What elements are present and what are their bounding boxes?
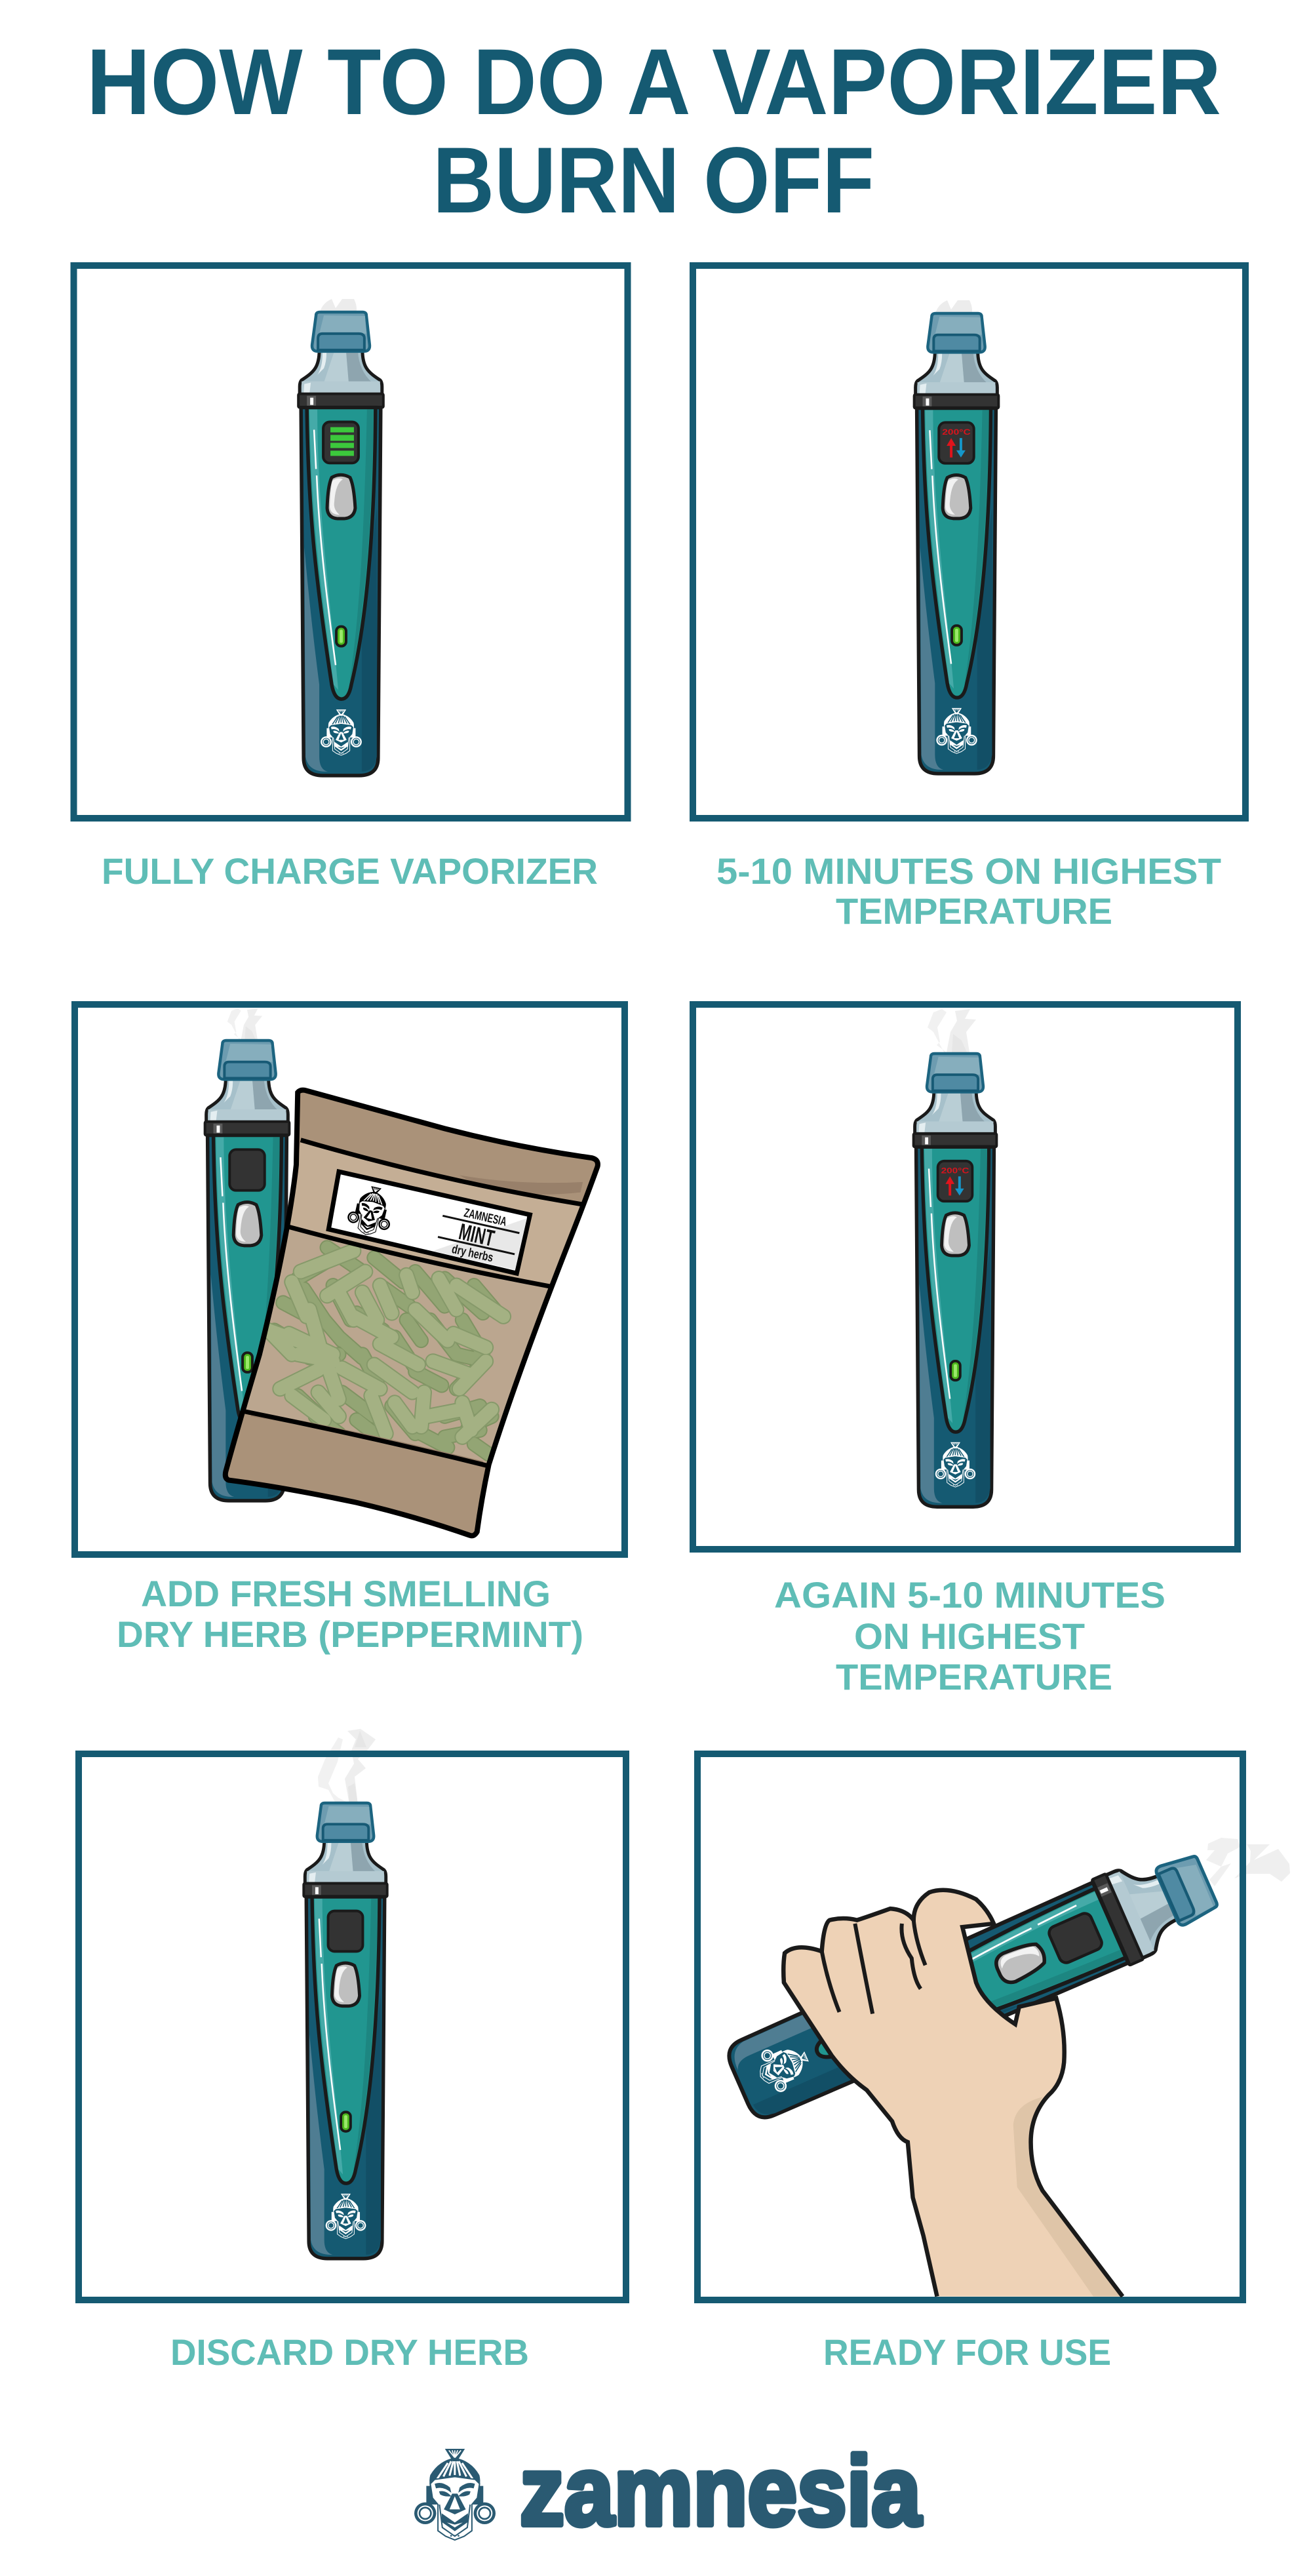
caption: [774, 1574, 1165, 1697]
caption: ON HIGHEST: [854, 1615, 1085, 1657]
panel: step 1 fully charge: [73, 266, 628, 892]
icon: vape smoke: [318, 1729, 376, 1804]
caption: FULLY CHARGE VAPORIZER: [102, 850, 598, 892]
caption: ADD FRESH SMELLING: [141, 1573, 551, 1614]
panel: step 3 add dry herb: [75, 1004, 625, 1655]
panel: step 2 highest temperature: [693, 266, 1245, 932]
panel: step 6 ready for use: [697, 1754, 1290, 2373]
bag label text: MINT: [456, 1219, 497, 1252]
title: BURN OFF: [433, 129, 874, 233]
bag label text: [435, 1202, 522, 1269]
bag label text: dry herbs: [450, 1242, 494, 1265]
title: [87, 30, 1221, 233]
logo: [414, 2436, 922, 2546]
caption: DISCARD DRY HERB: [170, 2331, 529, 2373]
icon: vaporizer showing temperature: [914, 1054, 996, 1507]
icon: vaporizer behind bag: [205, 1040, 289, 1501]
icon: vaporizer with full battery: [298, 312, 383, 776]
icon: logo mask: [414, 2449, 496, 2540]
logo wordmark: zamnesia: [520, 2436, 922, 2546]
icon: vape smoke: [1206, 1838, 1290, 1886]
frame: [75, 1004, 625, 1555]
icon: mask on bag label: [345, 1183, 397, 1239]
panel: step 5 discard herb: [79, 1729, 626, 2373]
icon: vape smoke: [227, 1008, 262, 1040]
caption: [117, 1573, 583, 1655]
icon: hand: [783, 1890, 1123, 2297]
frame: [693, 266, 1245, 818]
caption: TEMPERATURE: [836, 890, 1112, 932]
panel: step 4 again highest temperature: [693, 1004, 1238, 1697]
caption: 5-10 MINUTES ON HIGHEST: [716, 850, 1221, 892]
icon: vaporizer: [303, 1803, 387, 2259]
icon: vape smoke: [320, 299, 357, 314]
frame: [693, 1004, 1238, 1549]
icon: vaporizer in hand: [721, 1838, 1226, 2128]
frame: [697, 1754, 1243, 2300]
icon: vaporizer showing temperature: [914, 313, 998, 774]
icon: vape smoke: [935, 300, 972, 315]
caption: [716, 850, 1221, 932]
caption: AGAIN 5-10 MINUTES: [774, 1574, 1165, 1615]
caption: DRY HERB (PEPPERMINT): [117, 1614, 583, 1655]
caption: READY FOR USE: [823, 2331, 1111, 2373]
title: HOW TO DO A VAPORIZER: [87, 30, 1221, 134]
icon: vape smoke: [928, 1009, 976, 1052]
frame: [79, 1754, 626, 2300]
caption: TEMPERATURE: [836, 1656, 1112, 1697]
icon: herb bag: [225, 1090, 598, 1536]
frame: [73, 266, 628, 818]
bag label text: ZAMNESIA: [463, 1206, 508, 1229]
